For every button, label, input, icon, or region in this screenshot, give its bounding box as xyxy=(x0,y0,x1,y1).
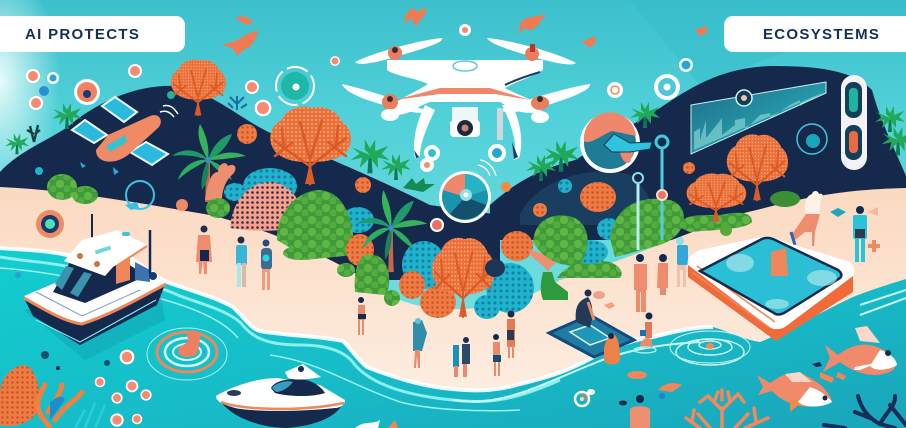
person xyxy=(493,334,501,376)
fish large xyxy=(823,326,897,375)
ripple buoy xyxy=(147,328,227,380)
person xyxy=(676,237,688,287)
drone xyxy=(342,38,590,172)
person xyxy=(261,240,272,290)
small sea life xyxy=(575,362,846,406)
label: ECOSYSTEMS xyxy=(724,16,906,52)
person walking xyxy=(791,191,823,246)
person xyxy=(453,337,470,377)
person xyxy=(507,310,515,358)
fish small xyxy=(757,372,832,412)
diver at bottom xyxy=(630,395,650,428)
status pill device xyxy=(841,75,867,170)
person xyxy=(358,297,366,335)
person xyxy=(634,254,647,312)
central reef: corals and bushes xyxy=(206,134,800,319)
people on the beach xyxy=(196,191,867,377)
boat center xyxy=(216,364,398,428)
magnifier circle with hand xyxy=(580,112,652,173)
person xyxy=(413,318,427,368)
floating sensor bubbles, left xyxy=(26,56,340,116)
tablet platform xyxy=(688,236,854,341)
circular scanner icon xyxy=(797,124,827,154)
coral bottom center xyxy=(686,390,768,428)
sky sensors right xyxy=(459,24,693,100)
label: ECOSYSTEMS: ECOSYSTEMS xyxy=(763,26,880,43)
dark hill right xyxy=(490,66,906,240)
sand markers xyxy=(36,207,880,252)
ripples xyxy=(670,331,750,365)
label: AI PROTECTS xyxy=(0,16,185,52)
beach xyxy=(0,187,906,400)
left bushes xyxy=(35,162,188,211)
person xyxy=(657,254,668,295)
coral trees on left hill xyxy=(171,60,371,193)
swimmers xyxy=(604,312,656,364)
blue coral on left hill xyxy=(228,96,247,110)
floating device with person xyxy=(549,290,634,357)
sensor poles xyxy=(633,136,668,250)
person teal xyxy=(853,206,867,262)
palms and plants on hills xyxy=(5,102,906,202)
coral bottom left xyxy=(0,365,105,428)
dark hill left xyxy=(0,86,500,280)
sea and shoreline xyxy=(0,248,906,428)
water bubbles xyxy=(15,272,152,427)
satellite xyxy=(72,97,178,165)
pie-chart drone sensor xyxy=(439,160,511,223)
dark coral bottom right xyxy=(824,396,906,428)
label: AI PROTECTS: AI PROTECTS xyxy=(25,26,140,43)
person xyxy=(236,236,247,287)
graph panel xyxy=(691,82,826,154)
boat left xyxy=(24,230,166,345)
person xyxy=(196,226,212,274)
small floating creatures in the sky xyxy=(222,7,708,56)
target sensor icon xyxy=(276,67,314,105)
